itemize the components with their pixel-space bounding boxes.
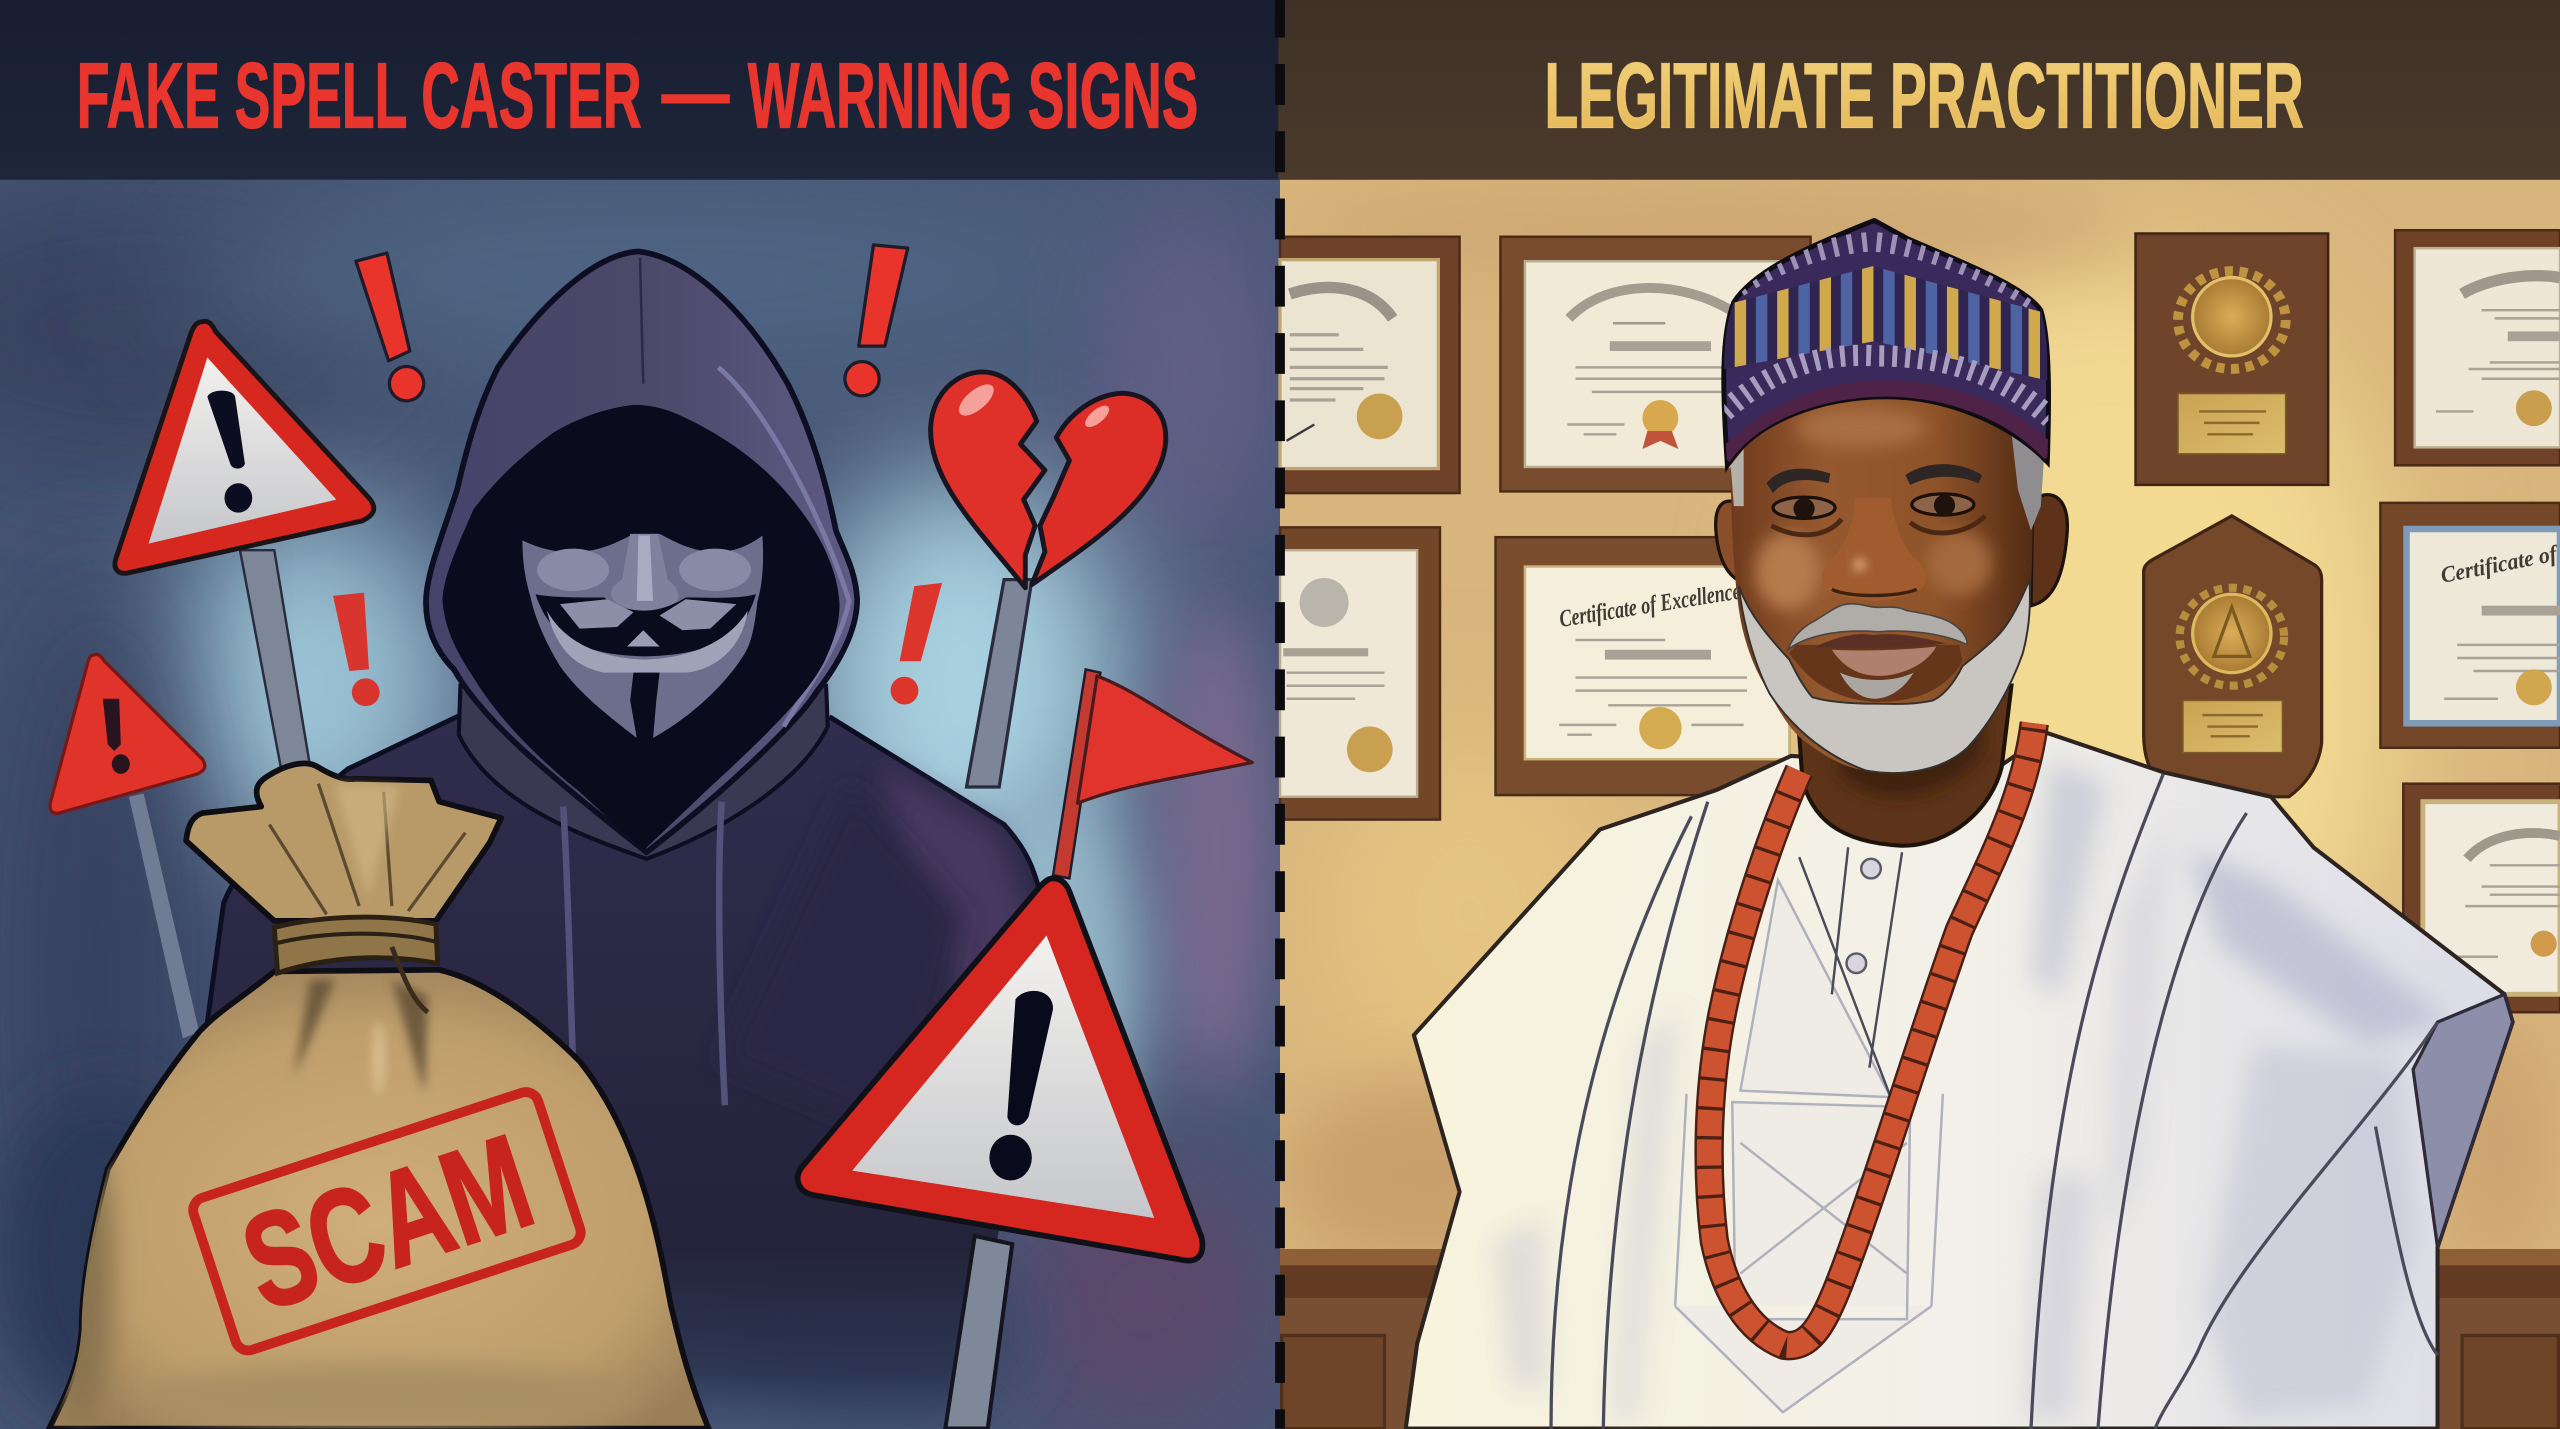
embroidery bbox=[1675, 880, 1943, 1412]
figure: hooded scammer bbox=[207, 251, 1045, 1429]
sleeve underside bbox=[2413, 994, 2513, 1247]
heading bar: left bbox=[0, 0, 1278, 180]
icon: red exclamation marks bbox=[333, 245, 942, 706]
certificate: lower right frame bbox=[2403, 784, 2560, 1012]
icon: red flag on pole bbox=[1053, 669, 1252, 878]
soul patch bbox=[1840, 673, 1913, 699]
bag top ruffle bbox=[186, 763, 501, 921]
background: blue purple brushed wall bbox=[0, 180, 1280, 1429]
eyes bbox=[1773, 497, 1835, 518]
certificate: middle left frame bbox=[1280, 527, 1440, 820]
placket and buttons bbox=[1799, 847, 1902, 1097]
hood shadow opening bbox=[442, 405, 839, 851]
lips bbox=[1816, 634, 1946, 648]
background: warm wall and wainscot bbox=[1280, 180, 2560, 1429]
panel: legitimate practitioner bbox=[1280, 180, 2560, 1429]
neck bbox=[1799, 686, 2011, 846]
icon: scam money bag bbox=[49, 763, 709, 1429]
certificate: of excellence frame bbox=[1496, 537, 1789, 795]
figure: practitioner bbox=[1406, 220, 2513, 1429]
certificate: top centre frame bbox=[1500, 237, 1811, 491]
ears bbox=[1716, 501, 1740, 581]
cap bbox=[1714, 220, 2057, 465]
grey temples bbox=[2011, 433, 2044, 531]
title: fake spell caster: — bbox=[661, 40, 730, 144]
robe shading bbox=[1494, 759, 2449, 1420]
eye bags bbox=[1771, 519, 1842, 535]
dashed centre divider bbox=[1277, 0, 1283, 1429]
title: fake spell caster: FAKE SPELL CASTER bbox=[77, 43, 642, 147]
robe fold lines bbox=[1551, 774, 2438, 1429]
bag body bbox=[49, 970, 709, 1429]
drawstrings bbox=[563, 807, 573, 1063]
heading bar: right bbox=[1278, 0, 2560, 180]
chin shadow bbox=[1789, 645, 1962, 702]
panel: fake spell caster bbox=[0, 180, 1280, 1429]
moustache bbox=[1788, 604, 1967, 650]
nose bbox=[1822, 498, 1926, 601]
red coral bead necklace bbox=[1709, 723, 2034, 1346]
robe bbox=[1406, 733, 2513, 1429]
guy fawkes mask bbox=[522, 534, 763, 738]
icon: broken heart on pole bbox=[931, 372, 1166, 787]
icon: small warning sign with pole bbox=[50, 654, 205, 1038]
certificate: top right frame bbox=[2395, 230, 2560, 465]
plaque: shield medal bbox=[2144, 516, 2322, 797]
certificate: blue border frame bbox=[2380, 503, 2560, 748]
eyebrows bbox=[1767, 469, 1830, 493]
scam stamp: SCAM bbox=[226, 1107, 549, 1339]
certificate: of excellence frame: Certificate of Excellence bbox=[1558, 578, 1742, 633]
bag rope tie bbox=[274, 917, 438, 973]
hood bbox=[426, 251, 857, 852]
cheek highlights bbox=[1755, 532, 1820, 611]
icon: large warning sign with pole bbox=[798, 878, 1202, 1429]
title: fake spell caster: WARNING SIGNS bbox=[748, 43, 1198, 147]
head bbox=[1731, 397, 2044, 772]
hood drape bbox=[459, 686, 828, 859]
icon: warning sign with pole, upper left bbox=[115, 321, 374, 767]
white beard bbox=[1739, 580, 2030, 773]
certificate: top left frame bbox=[1280, 237, 1460, 493]
plaque: laurel medal bbox=[2136, 233, 2328, 485]
hoodie body bbox=[207, 715, 1045, 1429]
